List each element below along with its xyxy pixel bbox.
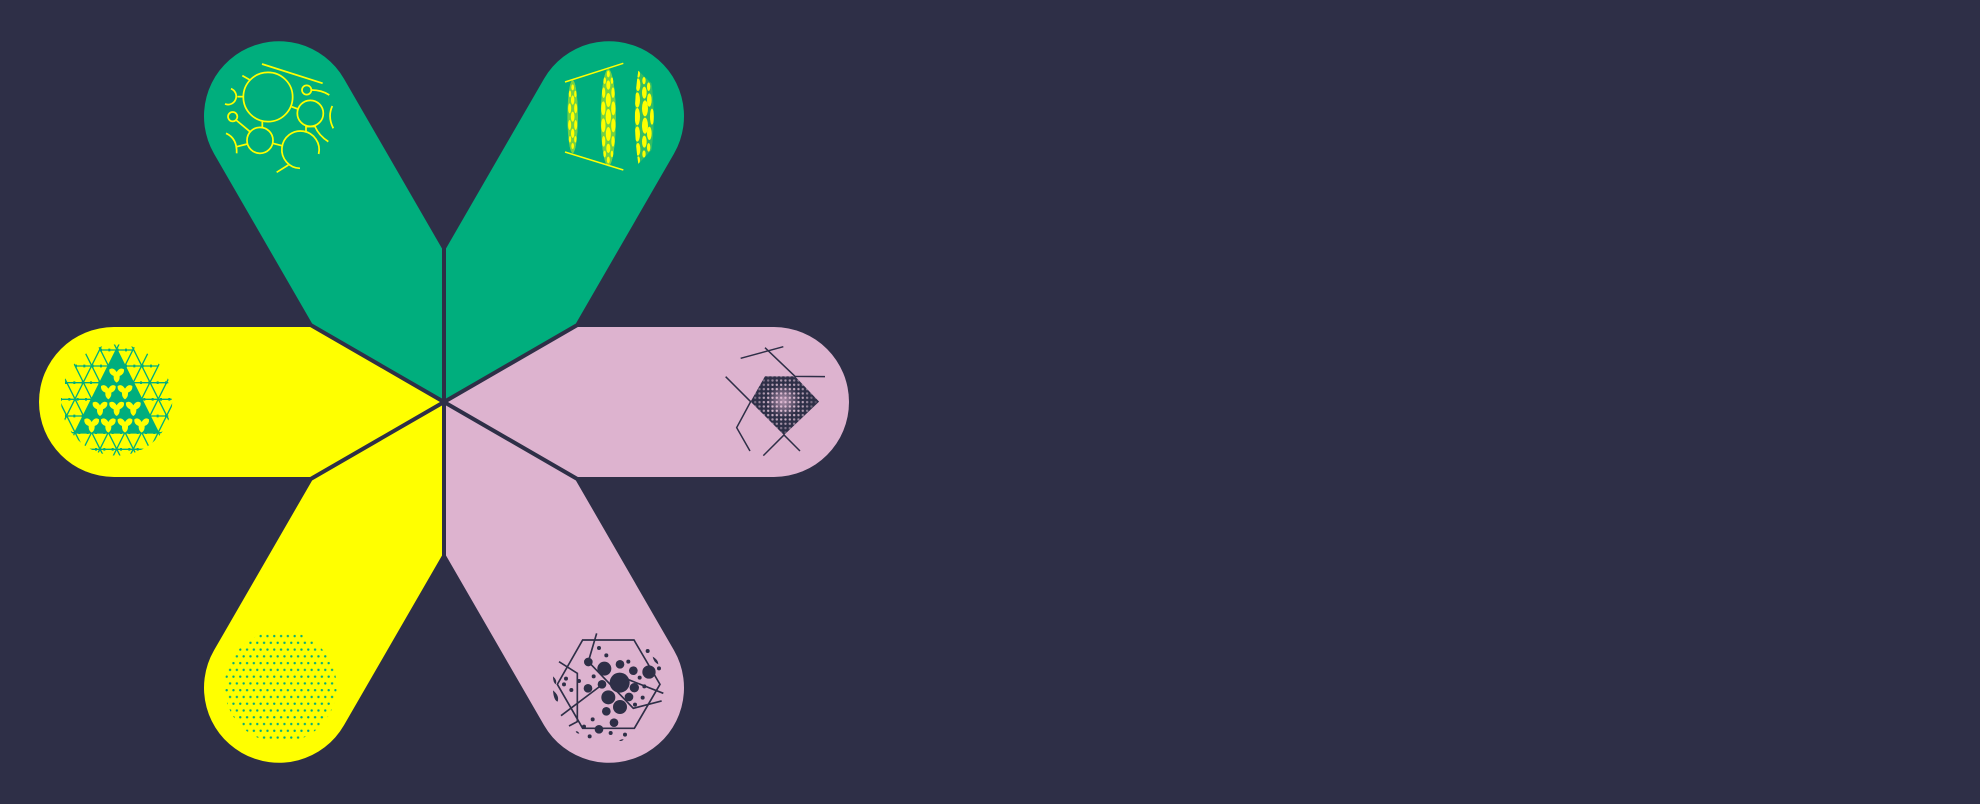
petal: bottom right pink	[381, 368, 711, 790]
icon: hexagon with scattered circles	[553, 633, 663, 741]
icon: dot grid circle	[225, 634, 336, 739]
petal: top right green	[381, 14, 711, 436]
scattered circles	[553, 646, 661, 741]
lens right	[635, 70, 654, 164]
lens middle	[601, 69, 616, 166]
trefoils	[84, 368, 149, 433]
petal: bottom left yellow	[177, 368, 507, 790]
icon: three lenses	[565, 63, 654, 170]
petal: left yellow	[39, 327, 440, 477]
halftone dots	[751, 376, 819, 435]
halftone fade	[751, 376, 819, 435]
halftone glow	[767, 384, 800, 417]
diamond lines	[726, 347, 825, 456]
lens lines	[565, 63, 623, 170]
lens left	[567, 80, 578, 153]
petal: right pink	[448, 327, 849, 477]
hexagon and lines	[557, 633, 663, 728]
icon: halftone diamond	[726, 347, 825, 456]
lattice lines	[61, 344, 172, 456]
diamond base	[751, 376, 819, 435]
icon: triangle lattice	[61, 344, 172, 456]
central solid triangle	[74, 349, 159, 434]
icon: network of circles	[225, 64, 333, 172]
petal: top left green	[177, 14, 507, 436]
